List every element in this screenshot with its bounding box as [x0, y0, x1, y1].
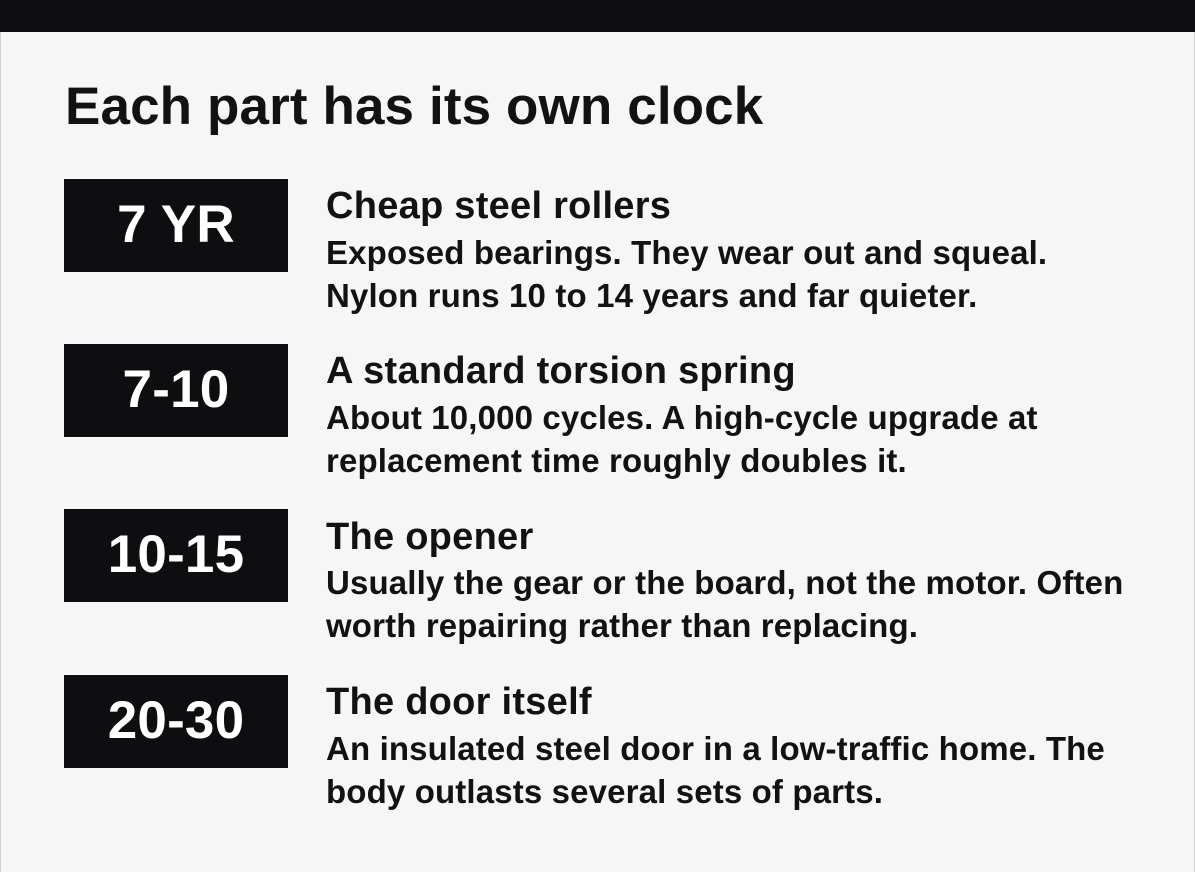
text: spring: [326, 399, 1038, 479]
top bar: [0, 0, 1195, 32]
text: spring: replacement time roughly doubles it.: [326, 442, 907, 479]
badge: 20-30: 20-30: [108, 691, 244, 750]
heading: rollers: Cheap steel rollers: [326, 185, 671, 227]
left edge line: [0, 32, 1, 872]
title: Each part has its own clock: [65, 77, 763, 136]
text: door: An insulated steel door in a low-traffic home. The: [326, 730, 1105, 767]
badge: 10-15: [64, 509, 288, 602]
badge: 20-30: [64, 675, 288, 768]
text: rollers: Nylon runs 10 to 14 years and far quieter.: [326, 277, 977, 314]
text: rollers: Exposed bearings. They wear out and squeal.: [326, 234, 1047, 271]
badge: 7-10: [64, 344, 288, 437]
badge: 10-15: 10-15: [108, 525, 244, 584]
heading: door: The door itself: [326, 681, 592, 723]
text: door: [326, 730, 1105, 810]
badge: 7 YR: [64, 179, 288, 272]
badge: 7 YR: 7 YR: [117, 195, 235, 254]
heading: opener: The opener: [326, 516, 534, 558]
heading: spring: A standard torsion spring: [326, 350, 796, 392]
text: spring: About 10,000 cycles. A high-cycle upgrade at: [326, 399, 1038, 436]
text: opener: worth repairing rather than replacing.: [326, 607, 918, 644]
text: opener: [326, 564, 1123, 644]
text: door: body outlasts several sets of parts.: [326, 773, 883, 810]
text: rollers: [326, 234, 1047, 314]
right edge line: [1194, 32, 1195, 872]
text: opener: Usually the gear or the board, not the motor. Often: [326, 564, 1123, 601]
badge: 7-10: 7-10: [123, 360, 229, 419]
